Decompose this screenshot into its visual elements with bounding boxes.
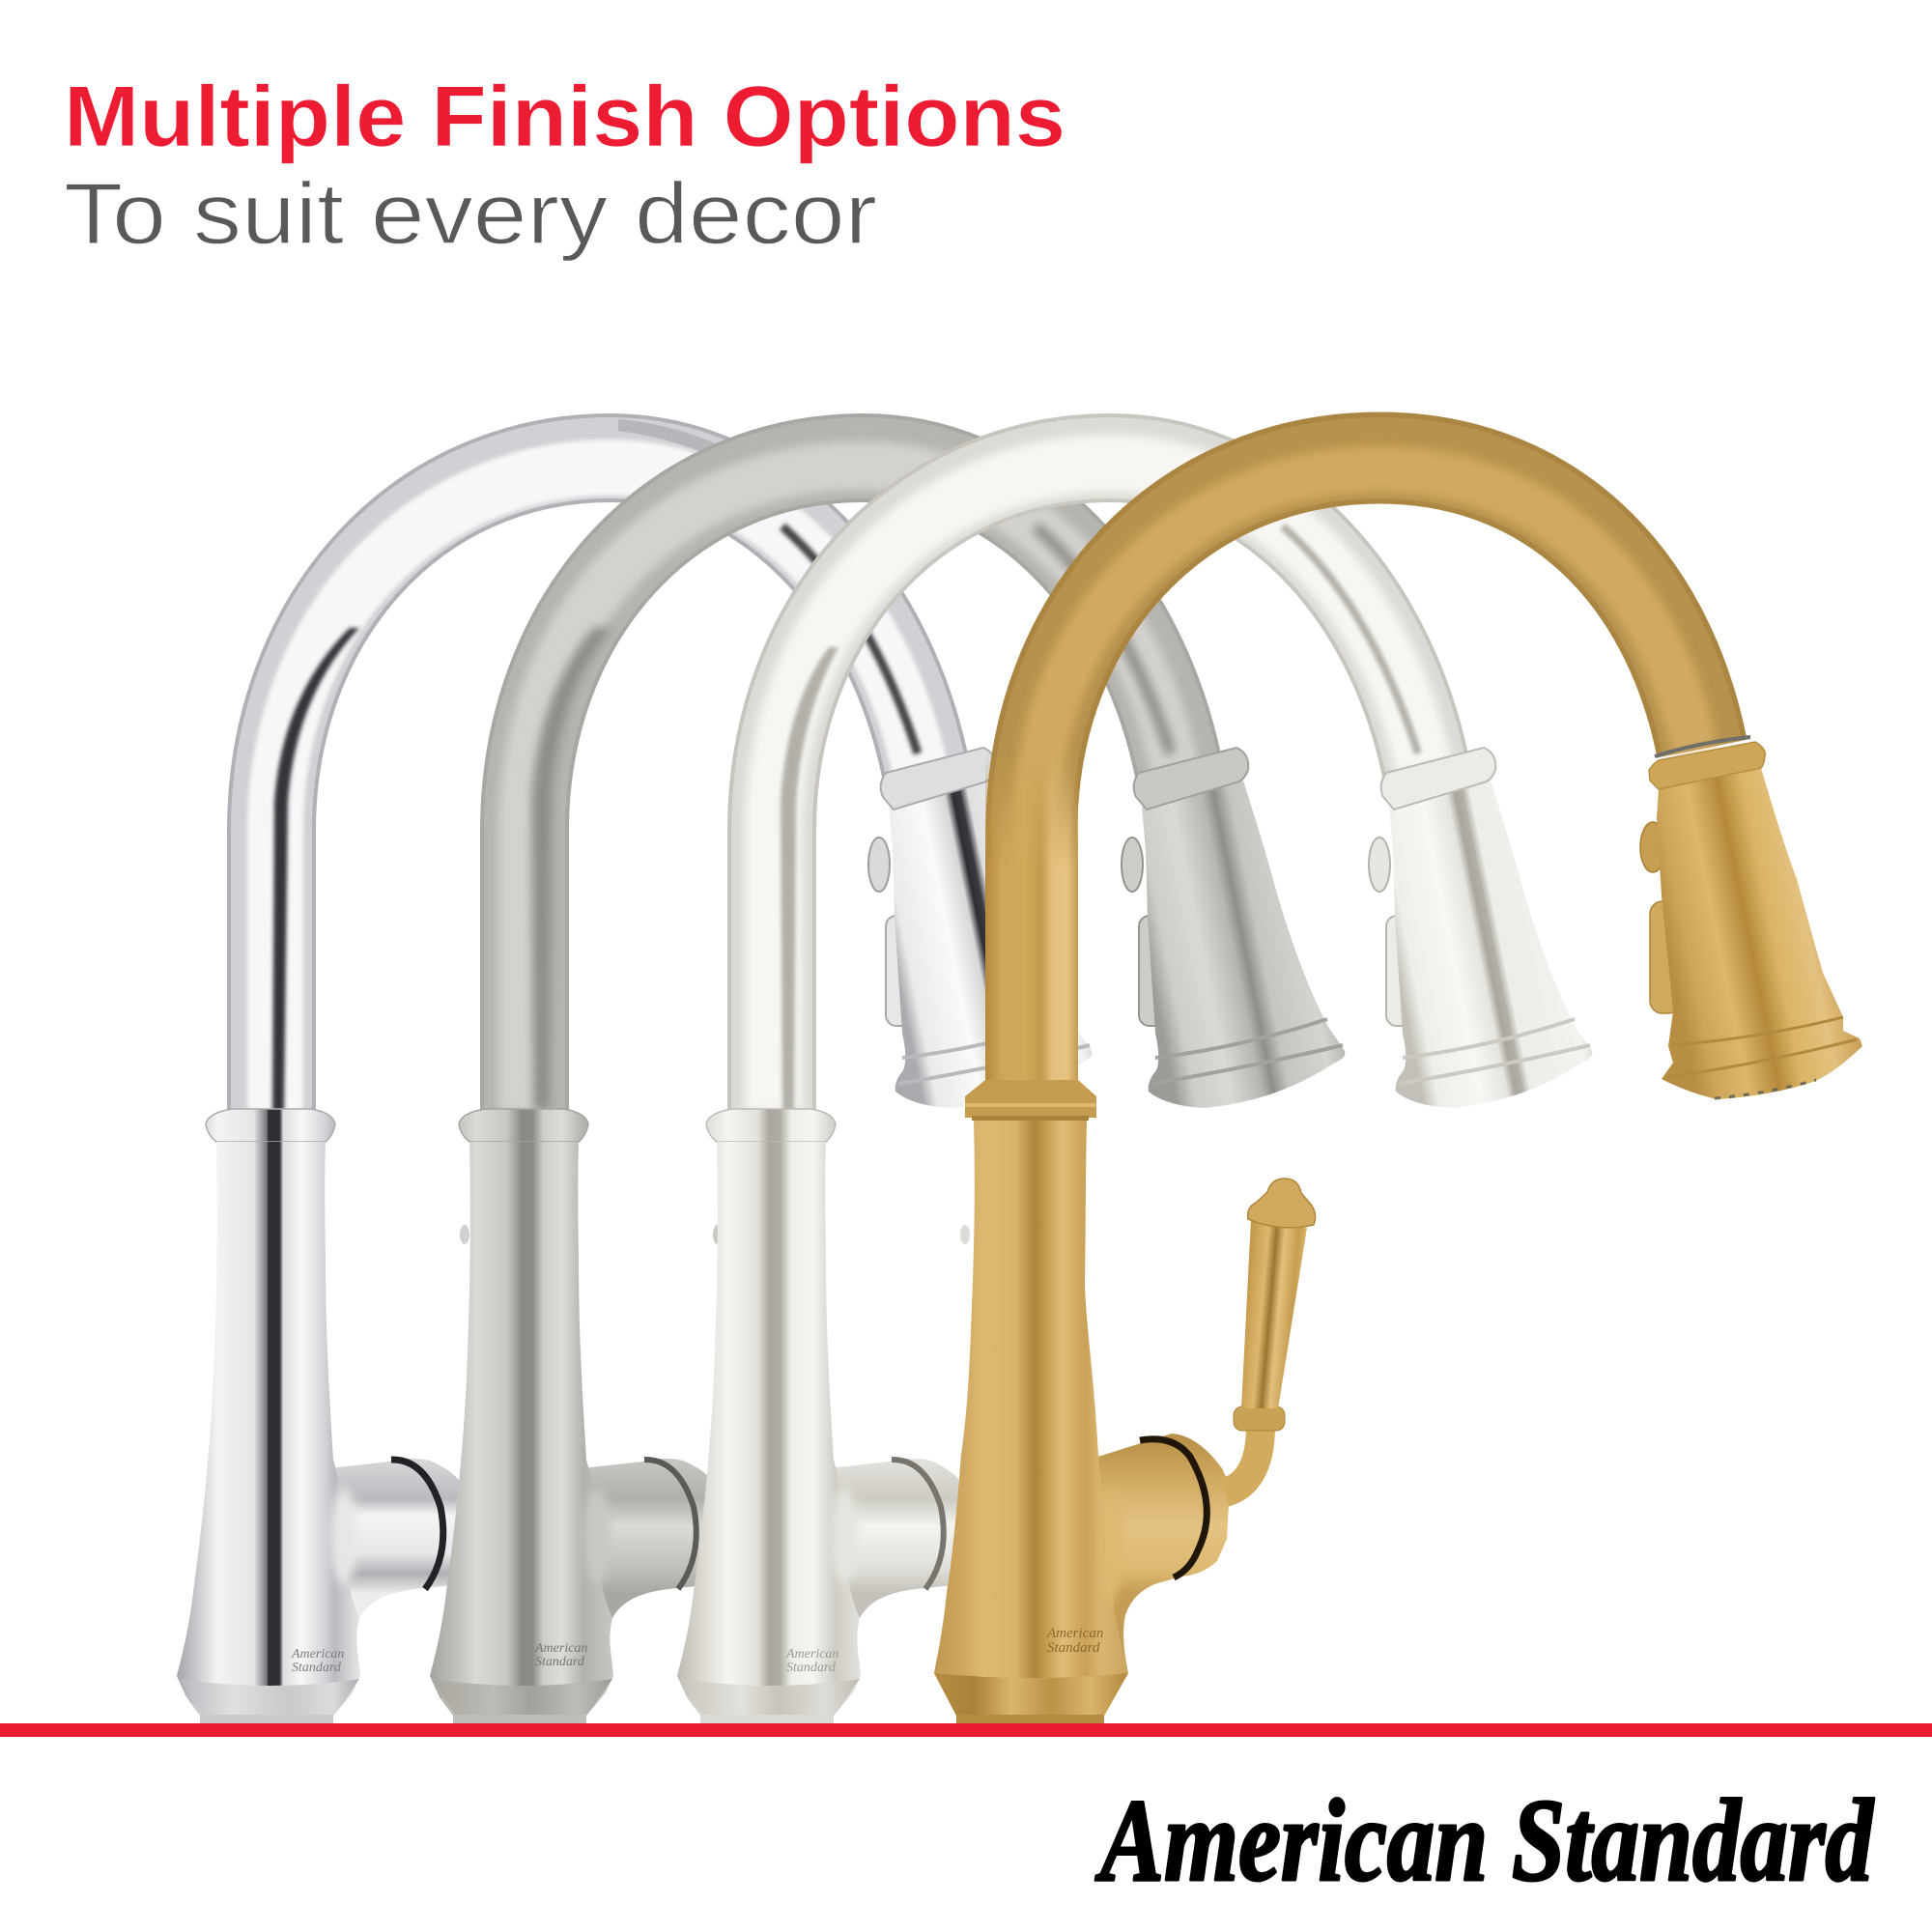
faucet: polished nickel finish: American bbox=[785, 1647, 838, 1662]
faucet: polished nickel finish: Standard bbox=[786, 1661, 837, 1675]
faucet: polished nickel finish bbox=[677, 458, 1592, 1725]
faucet: brushed gold finish: Standard bbox=[1047, 1640, 1100, 1656]
title: Multiple Finish Options: Multiple Finish Options bbox=[64, 68, 1065, 164]
faucet: brushed nickel finish: American bbox=[534, 1641, 587, 1656]
red baseline bar bbox=[0, 1723, 1932, 1737]
faucet: chrome finish: Standard bbox=[292, 1661, 342, 1675]
faucet: chrome finish bbox=[177, 419, 1092, 1725]
gold lever handle bbox=[1225, 1179, 1316, 1492]
faucet: brushed gold finish: American bbox=[1046, 1626, 1103, 1641]
faucet: brushed nickel finish: Standard bbox=[535, 1655, 585, 1669]
faucet: chrome finish: American bbox=[291, 1647, 344, 1662]
subtitle: To suit every decor: To suit every decor bbox=[64, 166, 877, 263]
faucet: brushed nickel finish bbox=[430, 458, 1345, 1725]
faucet: brushed gold finish bbox=[934, 458, 1862, 1725]
gold pull-down head bbox=[1640, 737, 1862, 1099]
